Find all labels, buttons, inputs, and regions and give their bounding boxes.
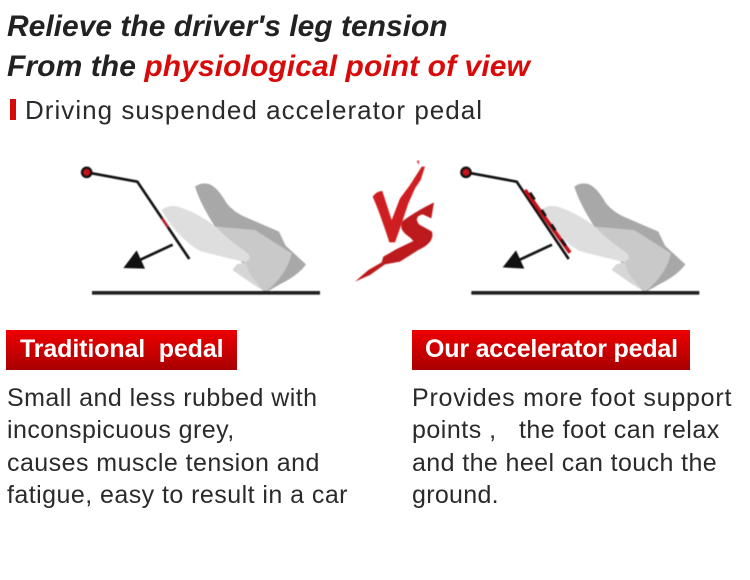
- force arrow: [503, 245, 552, 269]
- splatter: [417, 160, 419, 165]
- pivot: [461, 168, 471, 177]
- text: traditional pedal description: Small and less rubbed with: [7, 384, 317, 412]
- pedal arm: [87, 172, 189, 259]
- text: traditional pedal description: inconspicuous grey,: [7, 416, 235, 444]
- foot, dark position: [574, 183, 685, 291]
- heading line 2: From the physiological point of view: [7, 50, 530, 83]
- foot: two overlapping positions: [541, 183, 685, 291]
- foot, heel piece: [612, 262, 642, 290]
- force arrow: [123, 245, 173, 269]
- subtitle text: Driving suspended accelerator pedal: [25, 95, 483, 125]
- text: traditional pedal description: fatigue, easy to result in a car: [7, 481, 348, 509]
- foot, dark position: [195, 183, 306, 291]
- red marker bar: [10, 99, 16, 120]
- ground line: [471, 291, 699, 295]
- text: our pedal description: points , the foot can relax: [412, 416, 720, 444]
- pivot: [82, 168, 91, 177]
- foot, overlap area: [595, 227, 671, 291]
- foot, light toe: [541, 206, 629, 262]
- text: our pedal description: and the heel can touch the: [412, 448, 717, 476]
- VS emblem: [355, 160, 435, 282]
- small red contact point: [162, 218, 168, 227]
- foot, overlap area: [216, 227, 292, 291]
- text: traditional pedal description: [7, 384, 348, 509]
- foot, heel piece: [232, 262, 262, 290]
- text: our pedal description: Provides more foot support: [412, 384, 732, 412]
- foot: two overlapping positions: [162, 183, 306, 291]
- red pedal pad: [525, 190, 570, 253]
- pedal arm: [466, 172, 569, 259]
- text: traditional pedal description: causes muscle tension and: [7, 448, 320, 476]
- label: traditional pedal: [6, 330, 237, 370]
- label: traditional pedal: Traditional pedal: [20, 335, 223, 363]
- ground line: [92, 291, 320, 295]
- title: two-line heading: [7, 10, 532, 83]
- subtitle with red marker: [10, 95, 483, 125]
- foot, light toe: [162, 206, 250, 262]
- V letter: [373, 167, 425, 242]
- black grip studs: [530, 193, 566, 246]
- S letter with brush tail: [355, 202, 434, 282]
- text: our pedal description: [412, 384, 732, 509]
- diagram: traditional pedal: [80, 166, 321, 296]
- diagram: our accelerator pedal: [459, 166, 700, 296]
- label: our accelerator pedal: [412, 330, 690, 370]
- label: our accelerator pedal: Our accelerator pedal: [425, 335, 678, 363]
- heading line 1: Relieve the driver's leg tension: [7, 10, 448, 43]
- text: our pedal description: ground.: [412, 481, 499, 509]
